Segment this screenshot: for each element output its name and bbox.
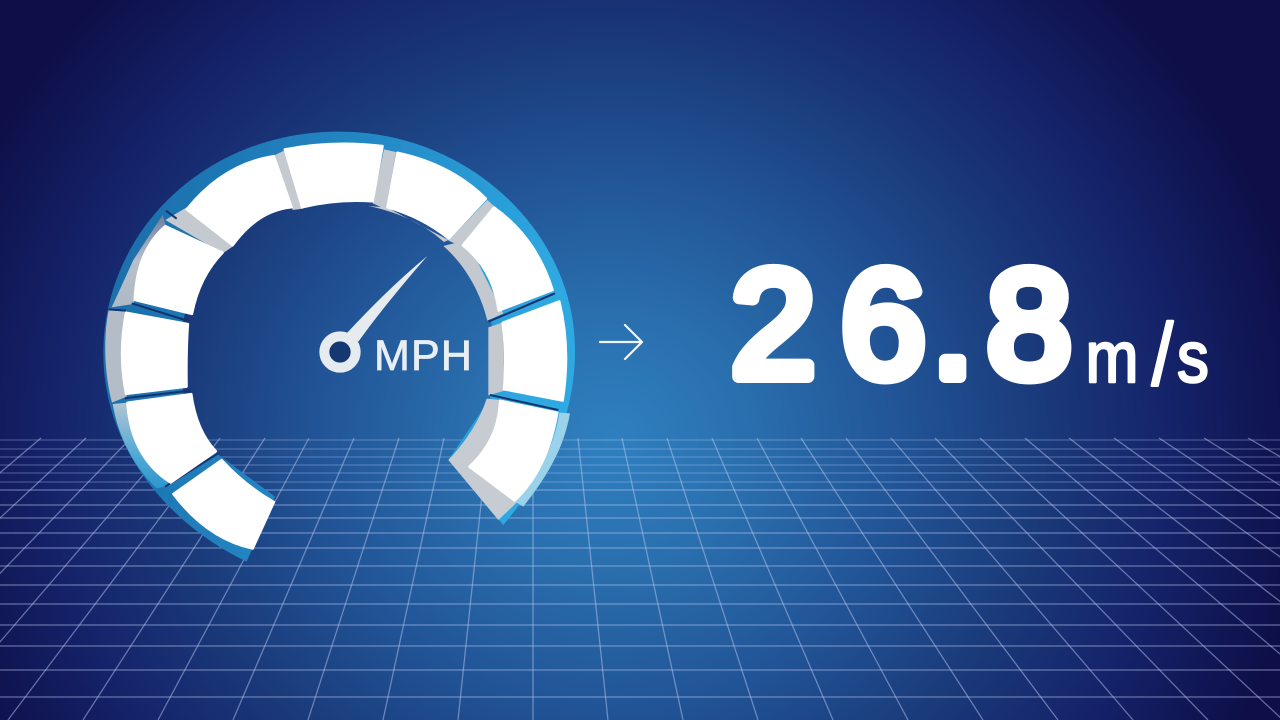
unit m/s: s (1177, 318, 1209, 398)
perspective floor grid (0, 438, 1280, 720)
value 26.8: 26.8 (731, 240, 1072, 410)
arrow (600, 325, 642, 359)
gauge rim base (103, 132, 575, 562)
needle hub ring (324, 336, 356, 368)
unit m/s: m (1086, 318, 1138, 398)
needle (324, 256, 427, 368)
unit m/s: / (1152, 305, 1174, 404)
grey rim shading (105, 149, 570, 520)
MPH label: MPH (374, 332, 473, 380)
speedometer gauge (103, 132, 575, 562)
dark gaps between segments (108, 211, 558, 487)
gauge segments (122, 144, 566, 549)
